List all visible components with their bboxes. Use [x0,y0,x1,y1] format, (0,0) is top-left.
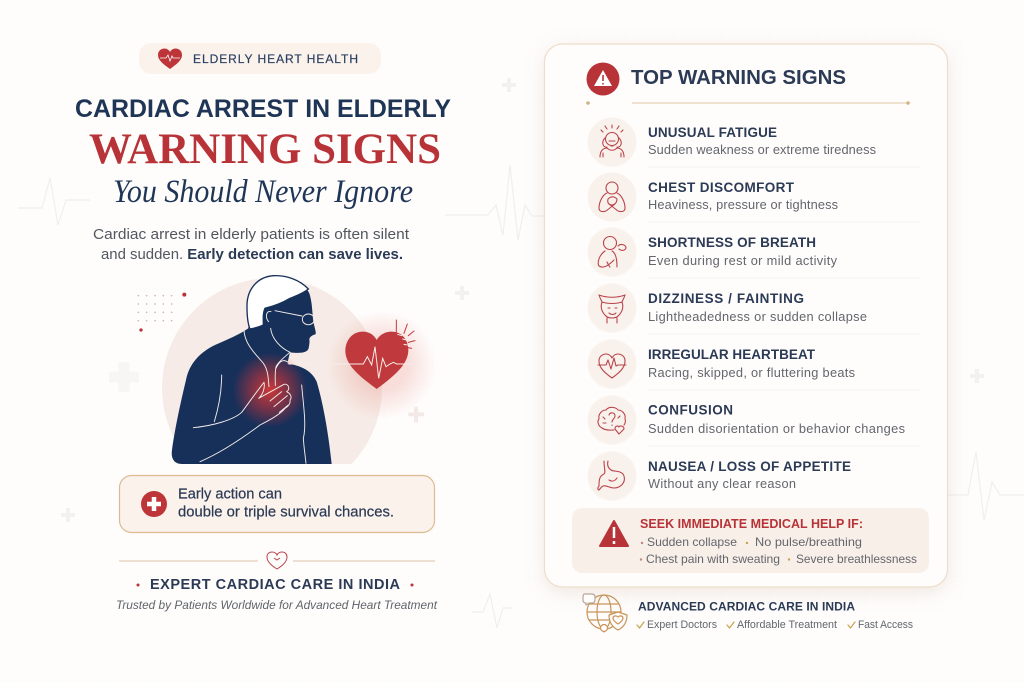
sign: shortness of breath: SHORTNESS OF BREATH [648,235,816,250]
icon: stomach [598,461,624,490]
sign: chest discomfort: CHEST DISCOMFORT [648,180,795,195]
heartbeat line [288,347,412,378]
heading rule [586,101,910,105]
badge: elderly heart health: ELDERLY HEART HEALTH [193,52,358,66]
tagline: Trusted by Patients Worldwide for Advanced Heart Treatment [116,598,438,612]
sign: nausea / loss of appetite: Without any clear reason [648,476,796,491]
badge: elderly heart health [139,43,381,74]
background: faint heartbeat lines and plus signs [18,78,1024,628]
alert list: No pulse/breathing [755,535,862,549]
callout text: double or triple survival chances. [178,504,394,520]
illustration: elderly man clutching chest with heart [138,275,430,464]
sign: dizziness / fainting: DIZZINESS / FAINTING [648,291,804,306]
footer checks: Fast Access [858,619,913,631]
callout text: Early action can [178,486,282,502]
dot grid [137,293,186,332]
sign: shortness of breath [588,228,838,276]
alert list: Severe breathlessness [796,552,917,566]
heart glow [327,310,437,420]
icon: breath [598,236,626,267]
callout: early action [120,476,434,532]
impact rays [396,320,415,348]
sign: nausea / loss of appetite [588,452,851,500]
pink backdrop circle [162,278,382,464]
sign: irregular heartbeat [588,340,855,388]
footer checks [637,619,913,631]
sign: unusual fatigue [588,118,876,166]
alert box: seek immediate medical help: SEEK IMMEDIATE MEDICAL HELP IF: [640,517,863,531]
sign: irregular heartbeat: Racing, skipped, or fluttering beats [648,365,855,380]
chest glow [233,353,307,427]
alert list: Chest pain with sweating [646,552,780,566]
icon: chest [599,182,625,212]
icon: brain with question mark [598,407,625,434]
icon: globe with shield [583,594,627,632]
title: cardiac arrest in elderly: CARDIAC ARREST IN ELDERLY [75,95,451,123]
expert cardiac care heading: EXPERT CARDIAC CARE IN INDIA [150,577,401,593]
alert box: seek immediate medical help [572,508,929,573]
man silhouette [172,281,332,464]
alert list [640,535,917,566]
sign: dizziness / fainting: Lightheadedness or sudden collapse [648,309,867,324]
title: warning signs: WARNING SIGNS [89,126,441,173]
footer: advanced cardiac care: ADVANCED CARDIAC CARE IN INDIA [638,600,855,614]
footer: advanced cardiac care [583,594,913,632]
decorative plus signs [109,362,139,392]
panel heading: TOP WARNING SIGNS [631,67,846,89]
icon: warning circle [586,62,620,96]
sign: dizziness / fainting [588,284,867,332]
divider with heart [119,552,435,569]
sign: irregular heartbeat: IRREGULAR HEARTBEAT [648,347,816,362]
footer checks: Expert Doctors [647,619,717,631]
icon: badge heart [158,48,182,69]
icon: medical cross [141,491,167,517]
callout text [178,486,394,520]
red heart [345,332,408,389]
alert list: Sudden collapse [647,535,737,549]
icon: heartbeat [598,354,626,378]
glasses, face and clothing lines [193,311,314,463]
sign: confusion: Sudden disorientation or behavior changes [648,421,905,436]
intro paragraph: and sudden. Early detection can save lives. [101,246,403,263]
sign: confusion: CONFUSION [648,402,733,418]
intro paragraph [93,226,410,263]
hair [247,276,308,329]
footer checks: Affordable Treatment [737,619,837,631]
icon: warning triangle [600,521,628,546]
sign: shortness of breath: Even during rest or mild activity [648,253,838,268]
intro paragraph: Cardiac arrest in elderly patients is often silent [93,226,410,243]
subtitle: you should never ignore: You Should Never Ignore [113,174,413,210]
sign: nausea / loss of appetite: NAUSEA / LOSS OF APPETITE [648,459,851,474]
icon: fatigue [600,125,624,157]
sign: chest discomfort: Heaviness, pressure or tightness [648,197,838,212]
sign: confusion [588,396,905,444]
panel: top warning signs [544,44,948,587]
sign: unusual fatigue: UNUSUAL FATIGUE [648,125,777,140]
icon: dizziness [599,295,625,323]
sign: unusual fatigue: Sudden weakness or extreme tiredness [648,142,876,157]
sign: chest discomfort [588,172,838,222]
